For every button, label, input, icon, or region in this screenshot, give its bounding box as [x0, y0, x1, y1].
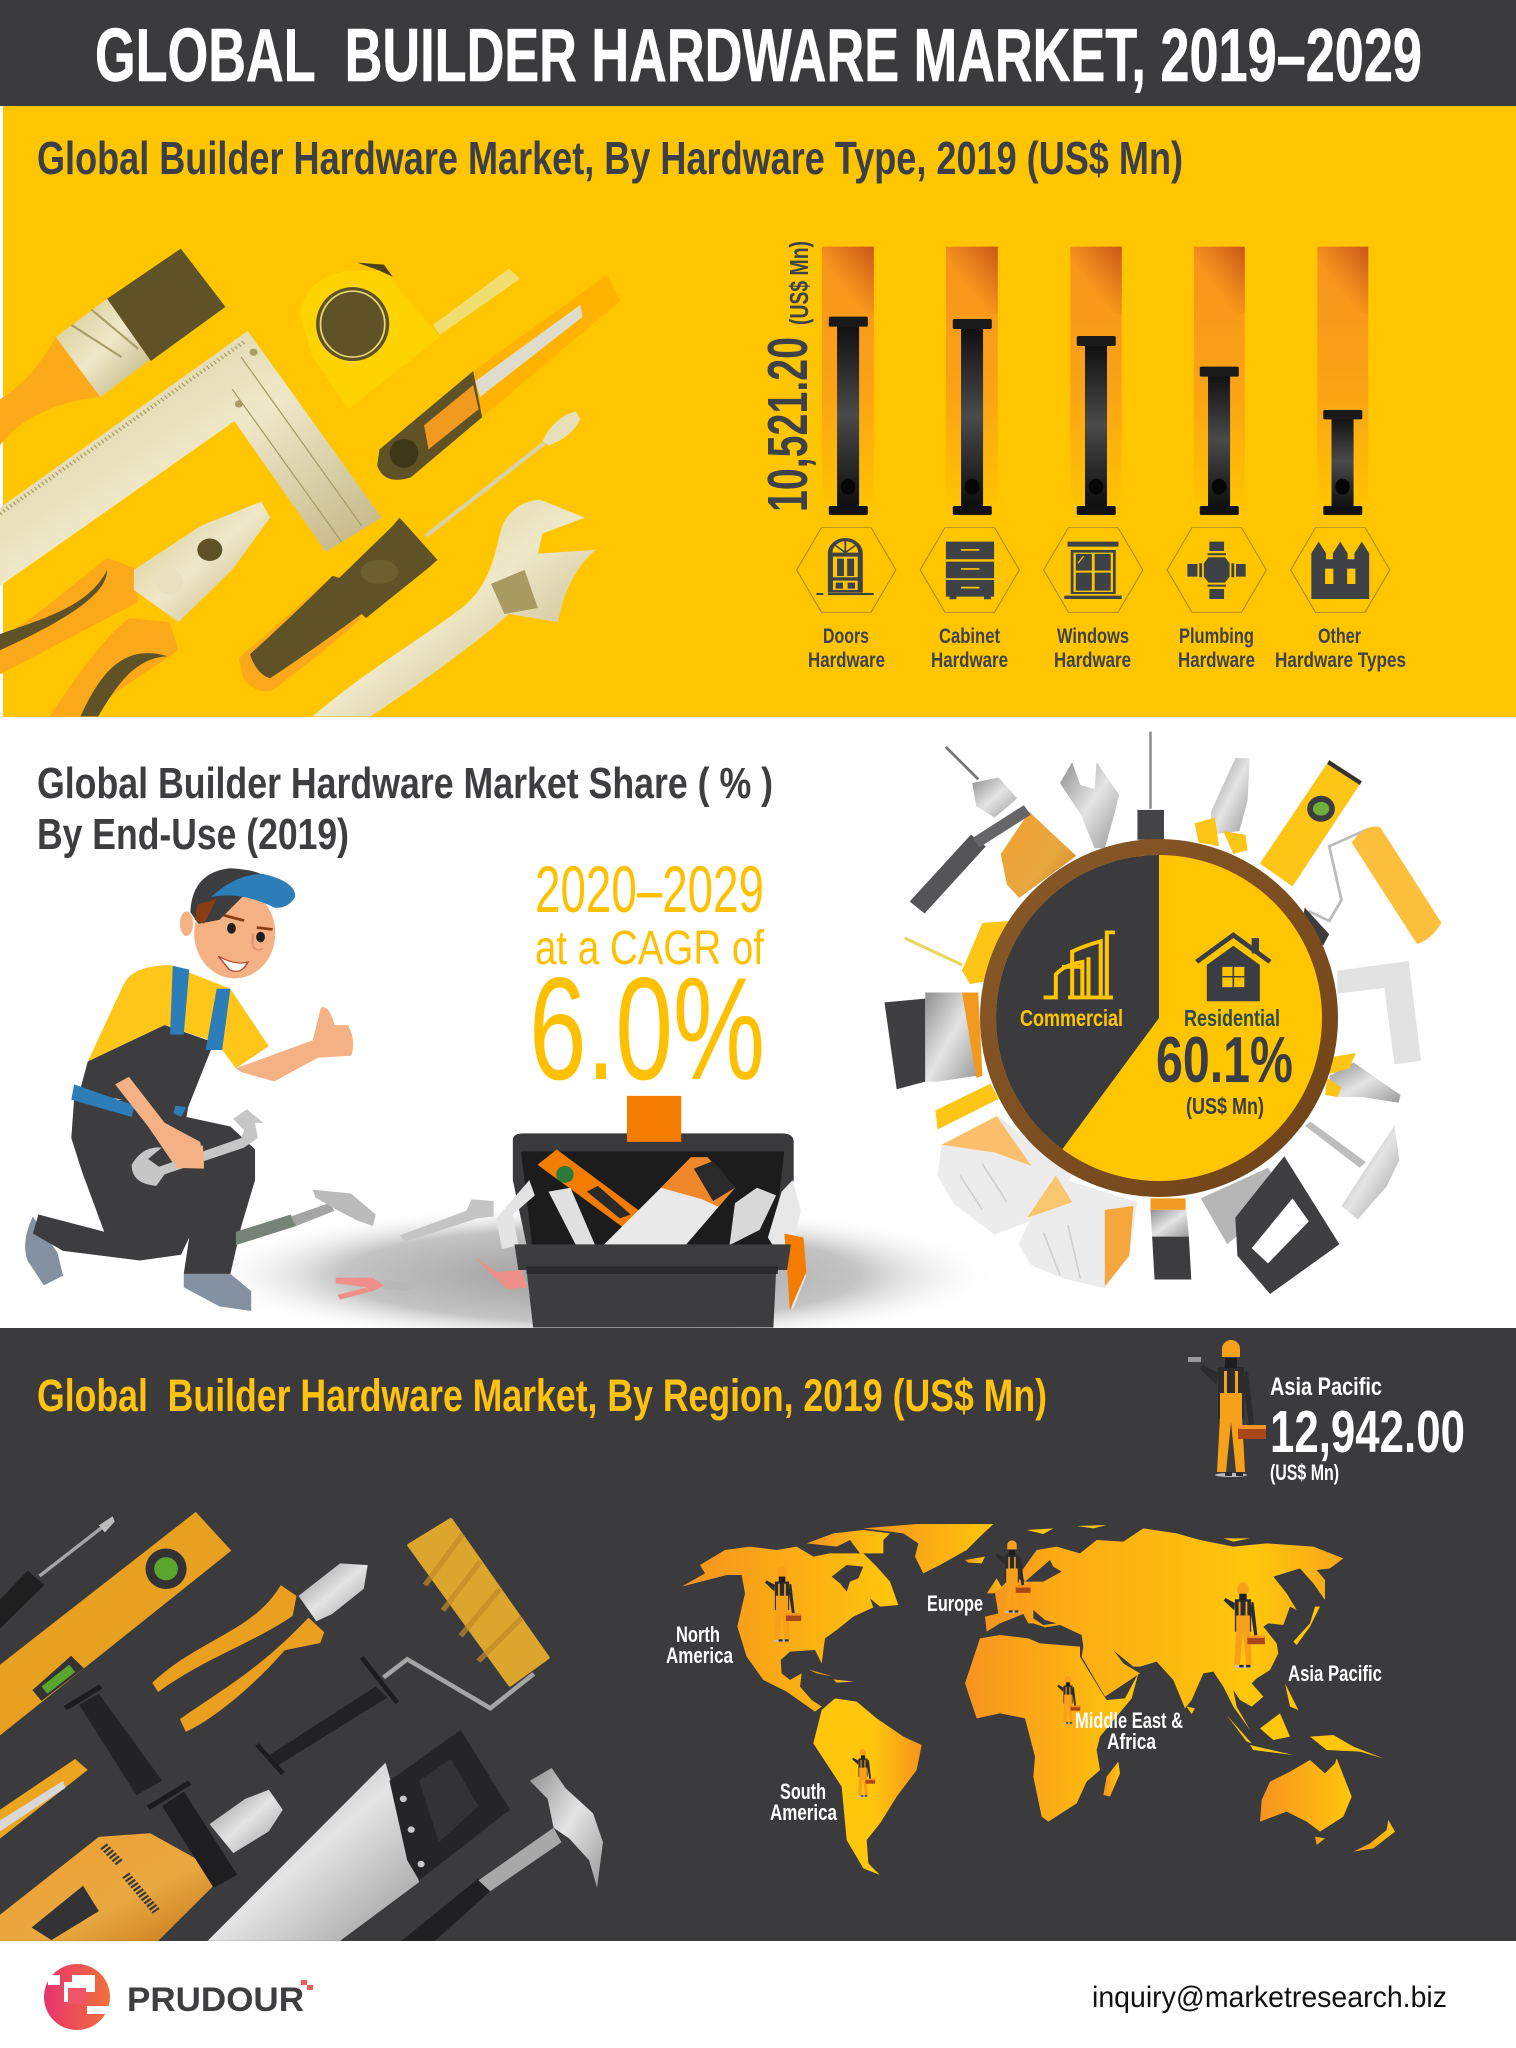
heading: region: Global Builder Hardware Market, By Region, 2019 (US$ Mn) [37, 1370, 1047, 1421]
icon: pipe fitting in hexagon [1167, 528, 1266, 612]
icon: screwdriver [0, 1516, 115, 1629]
category labels [808, 625, 1406, 672]
icon: hammer on floor [236, 1190, 376, 1245]
map labels: America [666, 1643, 734, 1668]
panel: region [0, 1328, 1516, 1941]
callout: asia pacific value [1188, 1340, 1465, 1485]
chart: hardware type bars [756, 241, 1406, 672]
category labels: Cabinet [939, 625, 1000, 648]
map: arctic islands [807, 1530, 890, 1553]
category labels: Hardware [808, 649, 885, 672]
map: madagascar [1103, 1762, 1120, 1797]
icon: large brush [884, 992, 982, 1089]
icon: commercial buildings [1044, 932, 1115, 999]
map labels: Asia Pacific [1288, 1661, 1382, 1686]
illustration: hand tools [0, 249, 620, 716]
map: africa [965, 1635, 1138, 1822]
icon: screwdriver [239, 411, 580, 691]
bar: windows hardware [1070, 247, 1122, 515]
label: residential share [1156, 1005, 1293, 1119]
icon: door in hexagon [797, 528, 896, 612]
chart: end-use pie with tools [884, 731, 1441, 1294]
icon: saw [208, 1730, 510, 1941]
map: south east asia islands [1187, 1683, 1383, 1758]
illustration: dark tools [0, 1512, 603, 1941]
callout: CAGR: at a CAGR of [535, 922, 765, 975]
callout: CAGR [529, 852, 765, 1110]
category labels: Hardware [1178, 649, 1255, 672]
icon: pliers [152, 1563, 368, 1732]
chart: world map [682, 1524, 1395, 1875]
icon: paint roller [257, 1520, 548, 1773]
map: caribbean [808, 1669, 854, 1683]
icon: fence in hexagon [1291, 528, 1390, 612]
logo: prudour [44, 1964, 313, 2030]
map: iceland [965, 1557, 985, 1563]
category labels: Doors [823, 625, 869, 648]
icon: carpenter square [0, 331, 382, 586]
icon: asia worker [1224, 1582, 1265, 1668]
icon: drill [0, 1687, 283, 1941]
label: residential share: 60.1% [1156, 1023, 1293, 1096]
icon: pliers [1195, 758, 1250, 854]
illustration: worker [25, 868, 353, 1311]
map: japan [1293, 1607, 1320, 1645]
heading: hardware type: Global Builder Hardware Market, By Hardware Type, 2019 (US$ Mn) [37, 132, 1183, 184]
map labels: Europe [927, 1591, 983, 1616]
icon: tape measure [299, 263, 520, 409]
category labels: Hardware [1054, 649, 1131, 672]
icon: square [1337, 961, 1421, 1064]
icon: spirit level [1260, 760, 1362, 886]
bar value label: (US$ Mn) [784, 241, 814, 325]
category labels: Hardware [931, 649, 1008, 672]
icon: screwdriver [1137, 731, 1164, 840]
bar: other hardware types [1317, 247, 1368, 515]
icon: hammer [401, 1768, 603, 1941]
label: commercial: Commercial [1020, 1005, 1123, 1031]
icon: worker [1188, 1340, 1266, 1477]
callout: CAGR: 6.0% [529, 947, 765, 1110]
bar: doors hardware [822, 247, 874, 515]
icon: spanner on floor [399, 1199, 494, 1241]
icon: cutters [1325, 1053, 1401, 1103]
icon: europe worker [996, 1540, 1031, 1613]
map: greenland [863, 1524, 993, 1573]
label: residential share: (US$ Mn) [1186, 1093, 1264, 1119]
icon: box cutter [377, 275, 620, 480]
icon: adjustable wrench [312, 500, 596, 716]
map: baltic and black sea [1025, 1560, 1062, 1625]
icon: hammer [1305, 1122, 1399, 1219]
icon: saw [1201, 1156, 1339, 1294]
category labels: Windows [1057, 625, 1129, 648]
pie segment: residential [996, 855, 1322, 1181]
map: new zealand [1353, 1820, 1395, 1852]
map: british isles [987, 1578, 1003, 1593]
icon: drill [917, 747, 1076, 908]
heading: end-use share: Global Builder Hardware Market Share ( % ) [37, 759, 773, 808]
panel: hardware type [0, 106, 1516, 717]
icon: small brush [1150, 1198, 1191, 1280]
callout: asia pacific value: Asia Pacific [1270, 1373, 1382, 1401]
icon: cutter [935, 1084, 999, 1129]
map labels: North [676, 1622, 720, 1647]
map: north america [682, 1547, 898, 1712]
pie segment: commercial [996, 855, 1159, 1149]
icon: window in hexagon [1044, 528, 1143, 612]
header band [0, 0, 1516, 106]
map labels [666, 1591, 1382, 1825]
ground shadow [200, 1203, 1000, 1347]
category labels: Plumbing [1179, 625, 1254, 648]
icon: spirit level [0, 1512, 231, 1735]
icon: wrench [1060, 762, 1119, 848]
heading: end-use share [37, 759, 773, 859]
icon: paint brush [0, 249, 225, 445]
icon: cutter [0, 1759, 88, 1839]
icon: house [1197, 935, 1270, 1001]
category labels: Other [1318, 625, 1361, 648]
callout: asia pacific value: (US$ Mn) [1270, 1460, 1339, 1485]
callout: CAGR: 2020–2029 [535, 852, 764, 926]
contact email: inquiry@marketresearch.biz [1092, 1981, 1447, 2014]
map: hudson bay [832, 1565, 863, 1592]
icon: africa worker [1057, 1676, 1080, 1724]
map: australia [1260, 1758, 1352, 1832]
icon: tape measure [905, 921, 1011, 984]
panel: end-use share [25, 731, 1441, 1347]
map labels: Middle East & [1075, 1708, 1183, 1733]
icon: pliers [0, 502, 270, 716]
map: arctic islands [1027, 1525, 1250, 1542]
icon: paint roller [1303, 827, 1441, 946]
icon: second pliers [474, 1257, 528, 1289]
footer [44, 1964, 1447, 2030]
map labels: Africa [1107, 1729, 1157, 1754]
bar: cabinet hardware [946, 247, 998, 515]
icon: cabinet in hexagon [920, 528, 1019, 612]
map labels: America [770, 1800, 838, 1825]
icon: north america worker [765, 1567, 801, 1642]
heading: end-use share: By End-Use (2019) [37, 810, 349, 859]
icon: toolbox [496, 1096, 806, 1327]
map: eurasia [985, 1528, 1343, 1730]
logo: prudour: PRUDOUR [127, 1981, 304, 2019]
bar: plumbing hardware [1194, 247, 1245, 515]
circle frame [980, 839, 1338, 1197]
map: tasmania [1315, 1837, 1325, 1845]
label: residential share: Residential [1184, 1005, 1280, 1031]
icon: gloves [938, 1116, 1137, 1288]
icon: south america worker [852, 1749, 875, 1797]
icon: pink pliers [336, 1278, 422, 1300]
category labels: Hardware Types [1275, 649, 1406, 672]
map labels: South [780, 1779, 826, 1804]
bar value label: 10,521.20 [756, 337, 820, 512]
map: south america [813, 1698, 922, 1875]
